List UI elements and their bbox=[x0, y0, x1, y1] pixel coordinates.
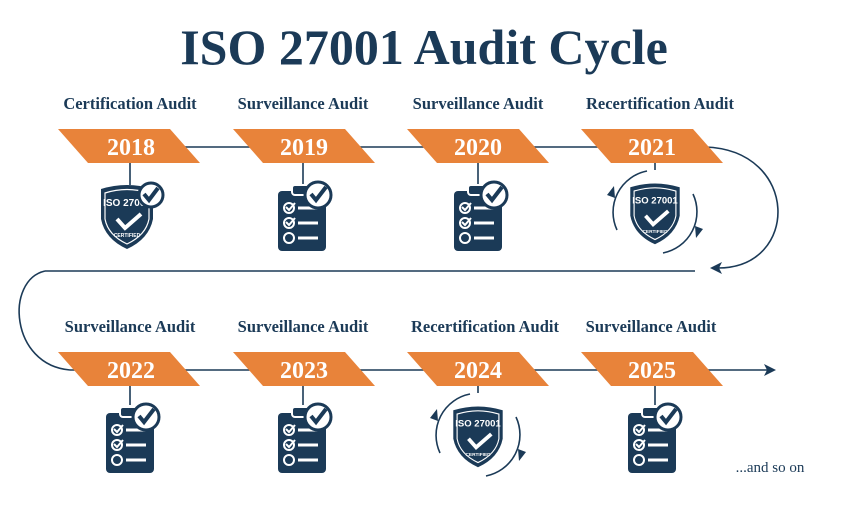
arrowheads bbox=[710, 262, 776, 376]
row 1 banners: 2019 bbox=[280, 135, 328, 161]
row 2 banners: 2023 bbox=[280, 358, 328, 384]
row 1 labels: Recertification Audit bbox=[586, 94, 735, 113]
row 1 banners: 2020 bbox=[454, 135, 502, 161]
row 1 labels: Certification Audit bbox=[63, 94, 197, 113]
row 2 labels: Surveillance Audit bbox=[65, 317, 196, 336]
timeline connectors bbox=[19, 147, 778, 405]
row 2 labels: Surveillance Audit bbox=[238, 317, 369, 336]
row 1 banners bbox=[58, 129, 723, 163]
row 1 banners: 2021 bbox=[628, 135, 676, 161]
row 2 icons bbox=[106, 394, 681, 476]
row 2 banners bbox=[58, 352, 723, 386]
row 2 banners: 2024 bbox=[454, 358, 502, 384]
row 2 labels: Recertification Audit bbox=[411, 317, 560, 336]
row 1 labels: Surveillance Audit bbox=[238, 94, 369, 113]
row 1 labels bbox=[63, 94, 735, 113]
row 1 labels: Surveillance Audit bbox=[413, 94, 544, 113]
row 2 banners: 2025 bbox=[628, 358, 676, 384]
row 2 labels: Surveillance Audit bbox=[586, 317, 717, 336]
row 1 icons bbox=[101, 171, 703, 253]
title: ISO 27001 Audit Cycle bbox=[180, 19, 668, 75]
row 2 banners: 2022 bbox=[107, 358, 155, 384]
row 1 banners: 2018 bbox=[107, 135, 155, 161]
row 2 labels bbox=[65, 317, 717, 336]
and so on note: ...and so on bbox=[736, 460, 805, 476]
